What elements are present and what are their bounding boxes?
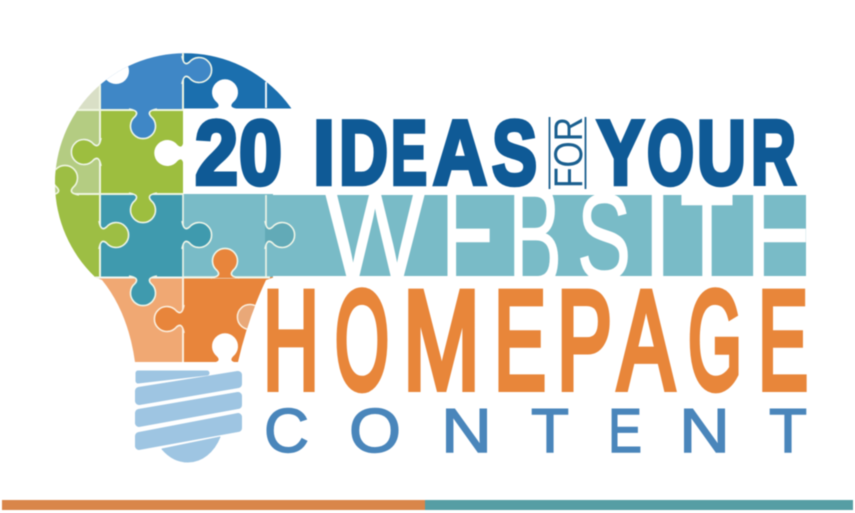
bottom divider bar: [2, 500, 853, 510]
puzzle holes: [154, 79, 239, 363]
title word: homepage: A: [618, 262, 674, 418]
title word: your: U: [697, 103, 746, 204]
title word: content: T: [531, 397, 569, 466]
title word: homepage: H: [263, 262, 319, 418]
band seams: [183, 194, 270, 277]
title word: website: B: [508, 152, 562, 320]
icon: puzzle light bulb: [50, 50, 806, 462]
website band: [183, 195, 806, 276]
title word: content: N: [679, 397, 730, 466]
title word: homepage: G: [688, 262, 742, 418]
title word: website: E: [441, 147, 497, 326]
title word: your: R: [751, 103, 796, 204]
title word: content: [264, 397, 807, 466]
title word: website: W: [325, 166, 425, 302]
title word: content: C: [264, 397, 309, 466]
title line: 20 ideas: 2: [195, 103, 238, 204]
title word: content: O: [349, 397, 401, 466]
title word: your: [597, 103, 796, 204]
title line: 20 ideas: S: [492, 103, 537, 204]
title word: content: N: [441, 397, 492, 466]
title word: for: FOR: [547, 117, 591, 188]
title line: 20 ideas: D: [339, 103, 388, 204]
puzzle knobs: [71, 56, 295, 333]
title word: website: [325, 194, 806, 277]
title word: your: Y: [597, 103, 644, 204]
title word: your: O: [647, 103, 694, 204]
title word: website: E: [745, 147, 815, 326]
title line: 20 ideas: [195, 103, 537, 204]
bulb screw base: [138, 373, 238, 462]
title word: homepage: [263, 262, 808, 418]
title line: 20 ideas: 0: [239, 103, 282, 204]
title word: homepage: E: [494, 262, 546, 418]
puzzle pieces: [54, 52, 292, 363]
top right puzzle seam: [265, 82, 267, 108]
title line: 20 ideas: E: [391, 103, 427, 204]
title word: homepage: M: [403, 262, 480, 418]
title word: website: I: [642, 166, 672, 302]
title line: 20 ideas: A: [433, 103, 487, 204]
title word: homepage: O: [335, 262, 389, 418]
title word: website: S: [577, 169, 631, 305]
title word: website: T: [680, 169, 734, 305]
title word: homepage: E: [758, 262, 808, 418]
title word: homepage: P: [557, 262, 612, 418]
title word: content: E: [608, 397, 642, 466]
title line: 20 ideas: I: [313, 103, 335, 204]
title word: content: T: [769, 397, 807, 466]
